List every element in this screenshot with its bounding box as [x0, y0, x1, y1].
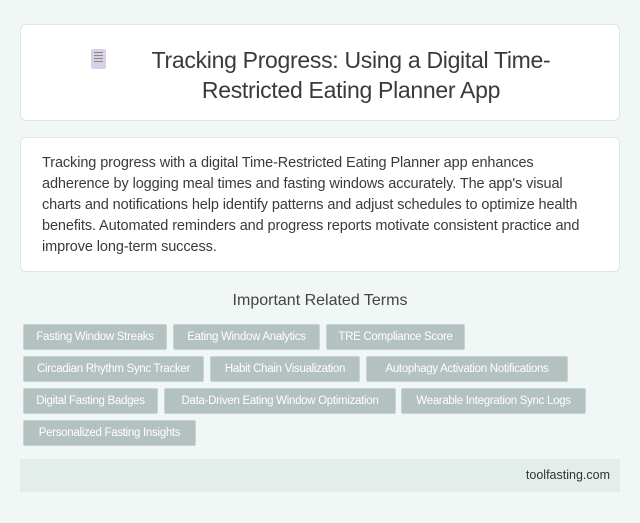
description card [20, 137, 620, 272]
title: Tracking Progress: Using a Digital Time-Restricted Eating Planner App [152, 47, 550, 103]
tags: Digital Fasting Badges [36, 395, 145, 407]
header card [20, 24, 620, 121]
tags: Data-Driven Eating Window Optimization [182, 395, 378, 407]
tags: Fasting Window Streaks [36, 331, 154, 343]
tags: TRE Compliance Score [338, 331, 453, 343]
tags: Wearable Integration Sync Logs [416, 395, 571, 407]
footer [20, 459, 620, 492]
tags: Habit Chain Visualization [225, 363, 345, 375]
tags: Circadian Rhythm Sync Tracker [37, 363, 190, 375]
description text: Tracking progress with a digital Time-Restricted Eating Planner app enhances adherence by logging meal times and fasting windows accurately. The app's visual charts and notifications help identify patterns and adjust schedules to optimize health benefits. Automated reminders and progress reports motivate consistent practice and improve long-term success. [42, 155, 579, 255]
tags: Autophagy Activation Notifications [385, 363, 549, 375]
tags: Eating Window Analytics [187, 331, 306, 343]
tags: Personalized Fasting Insights [39, 427, 180, 439]
icon: receipt [91, 49, 106, 69]
terms heading: Important Related Terms [233, 292, 407, 309]
footer text: toolfasting.com [526, 468, 610, 482]
